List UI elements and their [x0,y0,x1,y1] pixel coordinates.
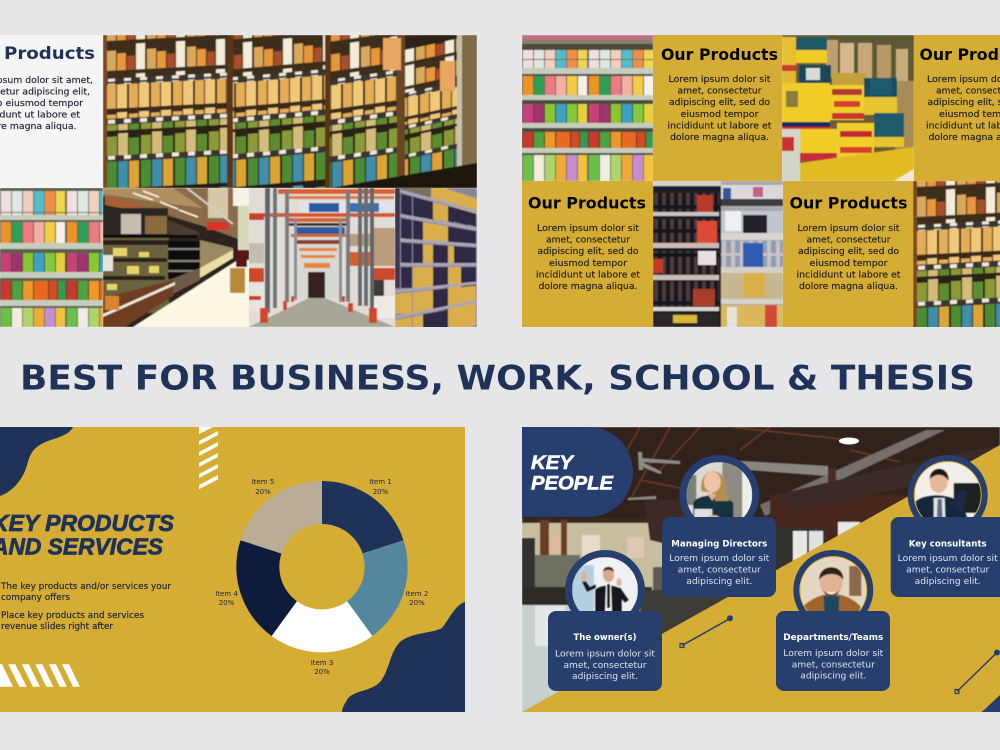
white stripes: top [199,427,218,489]
text tile: our products 4: eiusmod tempor [810,259,888,269]
text tile: our products 3: Our Products [528,194,646,212]
portrait: man at desk [914,462,981,517]
portrait: man presenting [572,557,638,611]
panel: yellow and photo checkerboard [522,35,1000,390]
card text: Lorem ipsum dolor sit [898,554,998,564]
card text: Lorem ipsum dolor sit [783,649,884,659]
chart labels: 20% [314,668,330,676]
title badge: key people: PEOPLE [531,474,614,494]
photo: bottled drinks cooler [653,181,783,327]
card text: adipiscing elit. [915,577,981,587]
yellow diagonal band [522,445,1000,712]
chart labels: Item 4 [215,590,238,598]
text tile: our products 1: Lorem ipsum dolor sit [668,75,771,85]
text tile: our products 3: dolore magna aliqua. [538,282,638,292]
card text [783,649,884,682]
bullet text [0,582,171,632]
text tile: our products 2 (cropped) [914,35,1000,181]
slide heading [0,510,174,560]
text tile: our products 1: eiusmod tempor [680,110,759,120]
card title: Managing Directors [671,540,767,550]
connector line: right [955,650,1000,694]
decorative blob: top left [0,427,73,496]
photo: supermarket aisle [103,188,249,327]
photo: grocery case crop [913,181,1000,327]
card text: adipiscing elit. [572,672,638,682]
text tile: our products 3: adipiscing elit, sed do [538,247,639,257]
panel: product photo collage on white [0,0,515,341]
portrait: smiling man in tan jacket [800,557,866,611]
text tile: our products 4 [783,181,913,327]
ceiling light [839,438,859,444]
text tile: our products 3: incididunt ut labore et [536,270,640,280]
bullet text: Place key products and services [1,611,144,621]
card title: Key consultants [909,540,987,550]
main headline: BEST FOR BUSINESS, WORK, SCHOOL & THESIS [20,358,975,398]
chart labels: 20% [219,599,235,607]
chart labels: 20% [409,599,425,607]
card text: amet, consectetur [906,566,989,576]
text tile: our products 4: incididunt ut labore et [796,270,901,280]
chart labels: Item 3 [311,659,333,667]
text tile: our products 1: incididunt ut labore et [668,122,772,132]
title badge: key people: KEY [531,453,575,474]
card text: amet, consectetur [564,661,647,671]
person card: departments and teams [776,550,890,691]
photo: refrigerated grocery cases [103,35,477,188]
text tile: our products 3: Lorem ipsum dolor sit [537,224,639,234]
text tile: our products 1 [653,35,782,181]
card text: adipiscing elit. [686,577,752,587]
chart labels: Item 5 [252,478,274,486]
bullet text: The key products and/or services your [0,582,171,592]
portrait: woman in denim jacket [686,462,752,517]
chart labels: Item 1 [369,478,392,486]
white stripes: bottom [0,664,80,687]
text tile: our products 4: adipiscing elit, sed do [798,247,900,257]
photo: canned goods shelving [395,188,477,327]
bullet text: revenue slides right after [1,622,113,632]
card text: Lorem ipsum dolor sit [555,650,655,660]
panel: key people slide [522,427,1000,712]
card text [669,554,770,587]
text tile: our products 1: amet, consectetur [678,86,762,96]
text tile: our products 4: Lorem ipsum dolor sit [798,224,900,234]
chart labels: 20% [255,488,271,496]
text tile: our products 4: dolore magna aliqua. [799,282,898,292]
heading: Products: Products [4,44,95,64]
card text [555,650,655,682]
card title: Departments/Teams [783,633,883,643]
chart labels: 20% [373,488,389,496]
navy corner [982,695,1000,712]
chart labels [215,478,428,676]
card text: Lorem ipsum dolor sit [669,554,770,564]
office photo background [522,427,1000,712]
person card: the owner [548,550,662,691]
text tile: our products 1: dolore magna aliqua. [670,133,769,143]
card text: amet, consectetur [792,660,875,670]
text tile: our products 4: Our Products [790,194,908,212]
card text: amet, consectetur [678,566,761,576]
person card: key consultants [891,455,1000,597]
text tile: our products 3: amet, consectetur [546,236,630,246]
text tile: our products 4: amet, consectetur [806,236,891,246]
photo: tuna cans [782,35,914,181]
chart labels: Item 2 [406,590,428,598]
photo: convenience store drinks shelf [522,35,653,181]
donut chart [236,481,408,652]
text tile: our products 1: Our Products [661,45,778,64]
title badge: key people [522,427,633,517]
text tile: our products 1: adipiscing elit, sed do [669,98,771,108]
photo: packaged goods shelf [0,188,103,327]
panel: key products and services slide [0,427,465,712]
connector line: left [680,615,733,648]
bullet text: company offers [1,593,70,603]
photo: warehouse racking [249,188,395,327]
card title: The owner(s) [574,633,636,643]
card text [898,554,998,587]
decorative blob: bottom right [342,602,465,712]
text tile: our products 3 [522,181,653,327]
text tile: our products 3: eiusmod tempor [549,259,627,269]
body text: lorem ipsum [0,76,93,132]
card text: adipiscing elit. [800,672,866,682]
person card: managing directors [662,455,776,597]
